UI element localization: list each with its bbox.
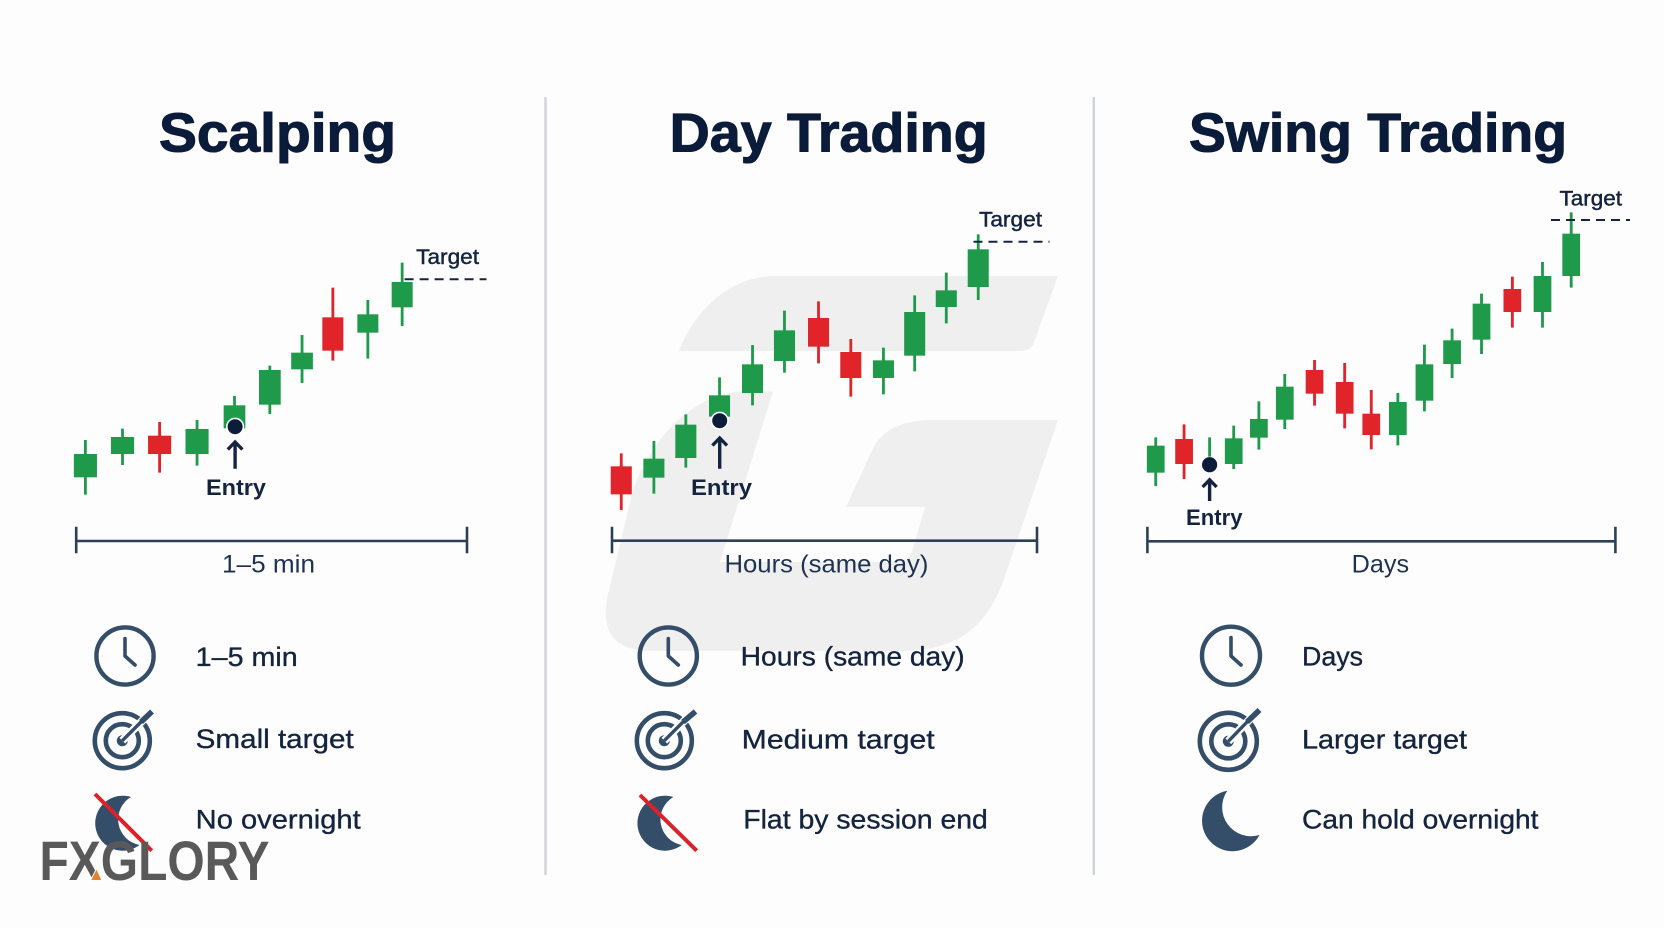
entry marker xyxy=(691,412,753,500)
entry marker xyxy=(206,418,267,500)
text: duration: Days xyxy=(1302,642,1363,672)
icon: moon xyxy=(1202,791,1260,851)
icon: clock xyxy=(96,627,154,685)
entry marker: Entry xyxy=(691,475,753,500)
target marker: Target xyxy=(979,209,1042,232)
entry marker xyxy=(1186,457,1243,530)
icon: moon crossed out xyxy=(637,795,697,851)
text: target size: Small target xyxy=(196,724,354,754)
icon: moon crossed out xyxy=(95,794,152,851)
entry marker: Entry xyxy=(1186,505,1243,530)
entry marker: Entry xyxy=(206,475,267,500)
timeline: days: Days xyxy=(1352,551,1409,579)
text: overnight rule: No overnight xyxy=(196,804,361,834)
timeline: hours: Hours (same day) xyxy=(724,551,928,579)
panel: scalping xyxy=(74,102,486,851)
heading: Day Trading: Day Trading xyxy=(670,102,988,164)
heading: Swing Trading: Swing Trading xyxy=(1189,102,1567,164)
candlestick chart: scalping xyxy=(74,263,413,495)
icon: target xyxy=(95,712,152,768)
icon: target xyxy=(1200,710,1260,770)
logo: FXGLORY: FXGLORY xyxy=(40,829,270,892)
panel: day trading xyxy=(611,102,1050,851)
icon: clock xyxy=(640,627,697,685)
timeline: 1–5 min: 1–5 min xyxy=(222,551,315,579)
candlestick chart: swing trading xyxy=(1147,212,1580,486)
target marker: Target xyxy=(416,246,479,269)
text: target size: Larger target xyxy=(1302,724,1468,754)
timeline: days xyxy=(1147,527,1615,579)
text: duration: Hours (same day) xyxy=(741,642,965,672)
text: overnight rule: Flat by session end xyxy=(743,804,988,834)
target marker xyxy=(1551,187,1630,220)
watermark: G logo xyxy=(606,276,1058,651)
target marker xyxy=(405,246,486,279)
text: target size: Medium target xyxy=(742,724,935,754)
panel: swing trading xyxy=(1147,102,1630,851)
text: duration: 1–5 min xyxy=(196,642,298,672)
icon: clock xyxy=(1202,627,1260,685)
target marker: Target xyxy=(1560,187,1622,210)
text: overnight rule: Can hold overnight xyxy=(1302,804,1539,834)
timeline: 1–5 min xyxy=(76,527,467,579)
icon: target xyxy=(637,712,696,768)
candlestick chart: day trading xyxy=(611,234,989,510)
timeline: hours xyxy=(612,527,1037,579)
heading: Scalping: Scalping xyxy=(159,102,396,164)
target marker xyxy=(974,209,1050,242)
